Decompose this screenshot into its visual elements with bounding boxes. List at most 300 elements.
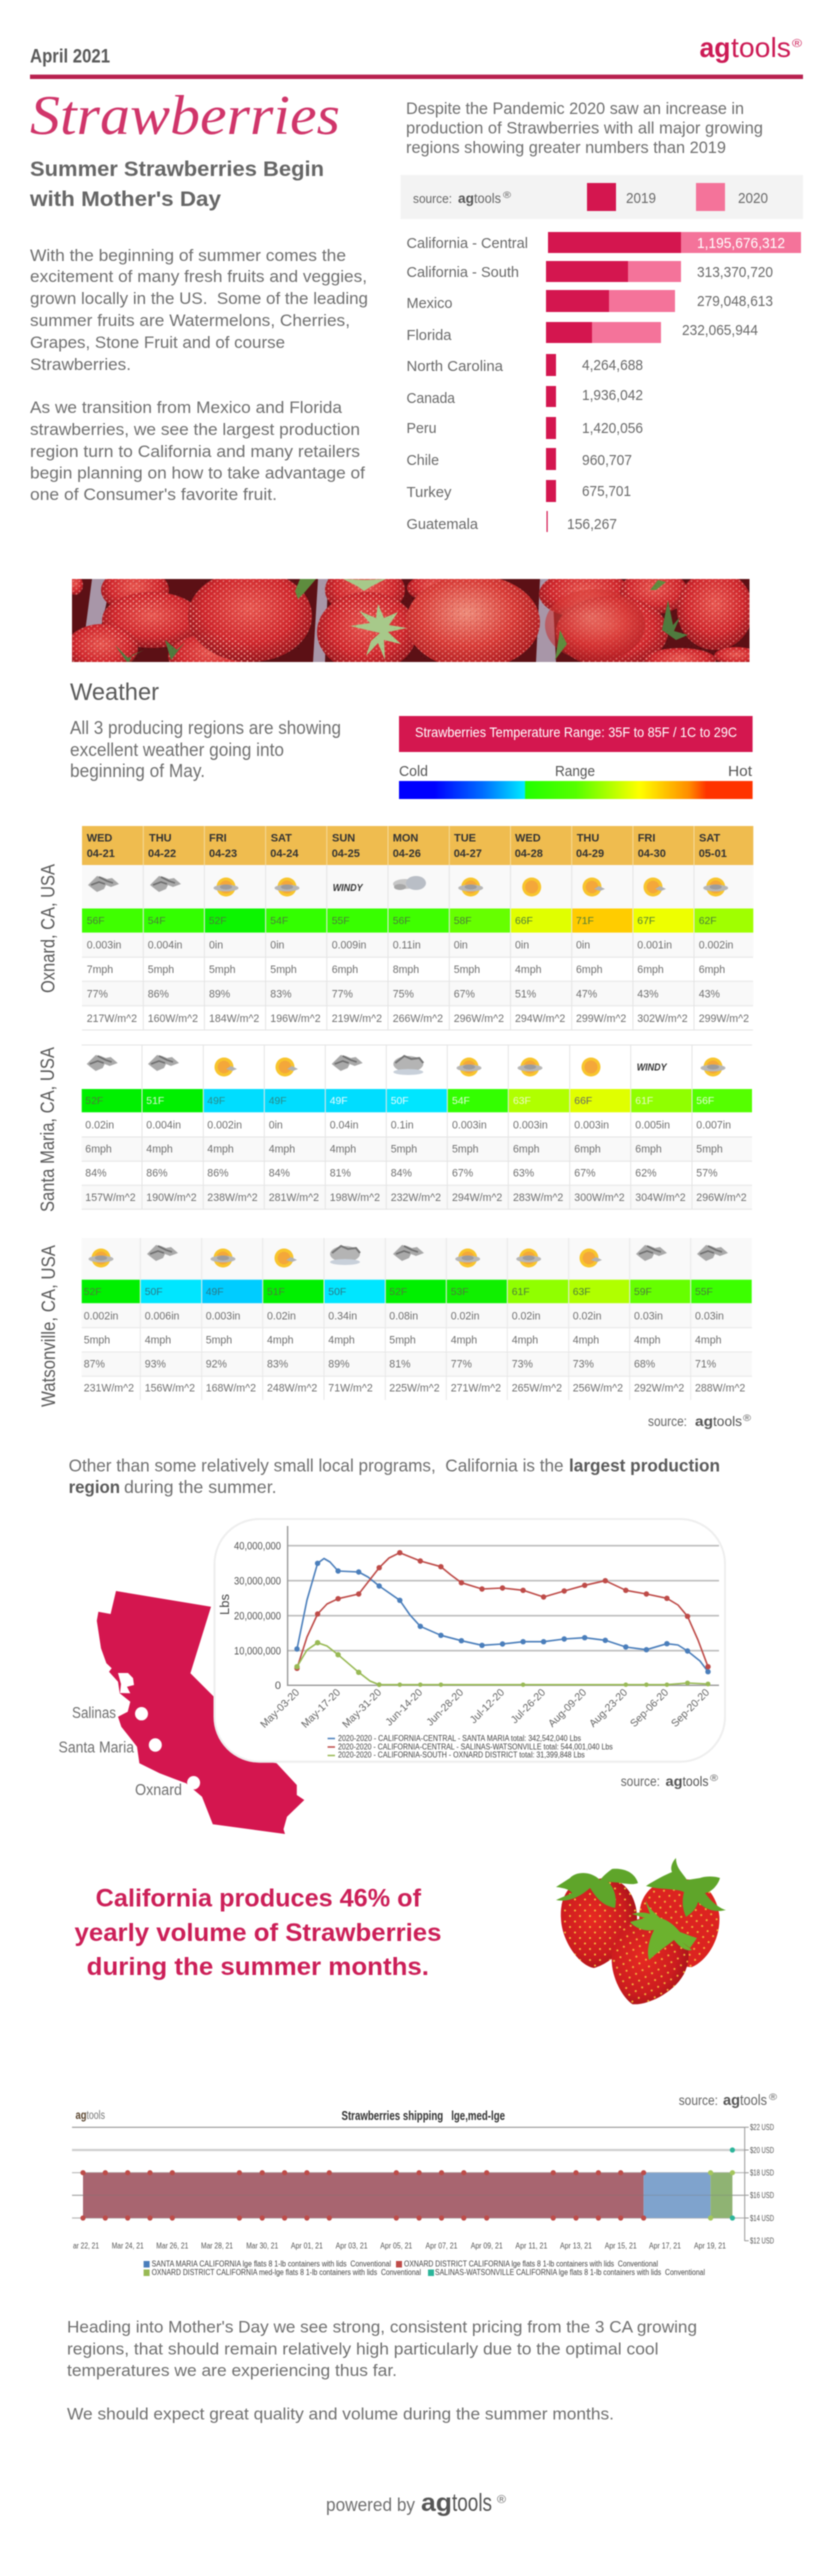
- date header: 04-22: [148, 848, 176, 860]
- humidity row: 83%: [270, 988, 292, 1000]
- humidity row: 77%: [332, 988, 353, 1000]
- y axis title: Lbs: [217, 1594, 232, 1615]
- humidity row: 67%: [454, 988, 475, 1000]
- humidity row: 84%: [391, 1168, 412, 1180]
- temperature row: 61F: [512, 1287, 530, 1298]
- date axis labels: Mar 28, 21: [201, 2241, 233, 2250]
- callout: California share: California produces 46% of: [96, 1885, 422, 1913]
- row: Guatemala: [406, 511, 617, 533]
- intro text right: Despite the Pandemic 2020 saw an increase in: [406, 99, 744, 118]
- source credit: weather: tools: [713, 1414, 742, 1429]
- weather icons row: [82, 865, 753, 908]
- rainfall row: [82, 933, 753, 957]
- wind row: 4mph: [695, 1334, 722, 1346]
- temperature row: 66F: [574, 1096, 592, 1107]
- rainfall row: 0.003in: [574, 1119, 609, 1131]
- area: Santa Maria: [644, 2173, 711, 2218]
- humidity row: 62%: [635, 1168, 657, 1180]
- marker: Santa Maria: Santa Maria: [58, 1740, 134, 1757]
- date header: WED: [87, 833, 112, 845]
- humidity row: 92%: [206, 1358, 227, 1370]
- humidity row: 43%: [699, 988, 720, 1000]
- temperature row: 63F: [573, 1287, 591, 1298]
- date axis labels: Apr 05, 21: [380, 2241, 413, 2250]
- temperature row: 51F: [146, 1096, 164, 1107]
- humidity row: 83%: [267, 1358, 289, 1370]
- source credit: shipping chart: ag: [723, 2092, 740, 2109]
- chart logo: [76, 2110, 105, 2122]
- source credit: shipping chart: [679, 2092, 777, 2109]
- header: agtools logo: [700, 32, 802, 63]
- legend key 2020: [696, 183, 768, 211]
- chart legend: 2020-2020 - CALIFORNIA-CENTRAL - SANTA MARIA total: 342,542,040 Lbs: [338, 1734, 581, 1743]
- date header: SUN: [332, 833, 355, 845]
- row: Florida: 232,065,944: [682, 322, 758, 339]
- wind row: 6mph: [513, 1144, 540, 1156]
- row: Peru: 1,420,056: [582, 420, 643, 437]
- wind row: 4mph: [512, 1334, 538, 1346]
- date axis labels: Apr 03, 21: [336, 2241, 368, 2250]
- humidity row: 86%: [148, 988, 169, 1000]
- rainfall row: 0.003in: [452, 1119, 487, 1131]
- temperature row: 50F: [328, 1287, 346, 1298]
- date header: SAT: [699, 833, 720, 845]
- date axis labels: ar 22, 21: [73, 2241, 99, 2250]
- wind row: 4mph: [634, 1334, 661, 1346]
- weather table: Santa Maria: [82, 1045, 752, 1209]
- footer: powered by agtools: ag: [421, 2489, 452, 2517]
- callout: California share: yearly volume of Strawberries: [74, 1919, 442, 1947]
- solar radiation row: [82, 1185, 752, 1209]
- x axis labels: Jul-12-20: [468, 1687, 507, 1726]
- temperature row: 62F: [699, 916, 717, 927]
- rainfall row: 0.04in: [330, 1119, 359, 1131]
- date axis labels: Apr 15, 21: [605, 2241, 637, 2250]
- wind row: 5mph: [206, 1334, 232, 1346]
- x axis labels: Jun-14-20: [383, 1687, 425, 1729]
- intro text right: regions showing greater numbers than 2019: [406, 138, 726, 157]
- solar radiation row: 256W/m^2: [573, 1383, 623, 1395]
- rainfall row: 0.001in: [637, 939, 672, 951]
- title: Strawberries: [30, 85, 340, 147]
- x axis labels: Aug-23-20: [587, 1687, 630, 1730]
- marker: Salinas: [72, 1705, 148, 1722]
- wind row: 4mph: [267, 1334, 294, 1346]
- intro paragraph left: one of Consumer's favorite fruit.: [30, 485, 277, 504]
- humidity row: 86%: [207, 1168, 229, 1180]
- solar radiation row: 288W/m^2: [695, 1383, 745, 1395]
- temperature row: 50F: [145, 1287, 163, 1298]
- x axis labels: Sep-20-20: [669, 1687, 712, 1730]
- rainfall row: 0.006in: [145, 1310, 180, 1322]
- temperature color scale: Cold: [399, 763, 428, 780]
- rainfall row: 0in: [209, 939, 223, 951]
- date header: 04-23: [209, 848, 237, 860]
- area chart: shipping prices: [72, 2109, 774, 2277]
- source credit: line chart: tools: [682, 1774, 709, 1789]
- date axis labels: Apr 07, 21: [426, 2241, 458, 2250]
- legend key 2019: [587, 183, 656, 211]
- temperature row: 52F: [85, 1096, 103, 1107]
- intro paragraph left: Grapes, Stone Fruit and of course: [30, 333, 285, 352]
- temperature row: 54F: [452, 1096, 470, 1107]
- rainfall row: 0.02in: [512, 1310, 541, 1322]
- date axis labels: [73, 2241, 726, 2250]
- wind row: 5mph: [209, 964, 236, 976]
- wind row: 4mph: [207, 1144, 234, 1156]
- rainfall row: 0in: [454, 939, 468, 951]
- weather icons row: WINDY: [637, 1063, 668, 1074]
- solar radiation row: 292W/m^2: [634, 1383, 684, 1395]
- rainfall row: [85, 1119, 731, 1131]
- data points: [80, 2147, 735, 2221]
- rainfall row: 0in: [270, 939, 285, 951]
- rainfall row: 0.08in: [389, 1310, 418, 1322]
- closing text: Heading into Mother's Day we see strong, consistent pricing from the 3 CA growing: [67, 2318, 697, 2337]
- date axis labels: Apr 19, 21: [694, 2241, 726, 2250]
- chart legend: [328, 1734, 613, 1760]
- y axis labels: 30,000,000: [234, 1576, 281, 1588]
- weather heading: Weather: [70, 679, 159, 706]
- wind row: 4mph: [515, 964, 542, 976]
- price axis labels: $18 USD: [750, 2168, 774, 2178]
- series: Santa Maria: [294, 1558, 711, 1674]
- wind row: 6mph: [576, 964, 603, 976]
- footer: powered by agtools: powered by: [326, 2495, 415, 2515]
- solar radiation row: 302W/m^2: [637, 1013, 688, 1025]
- chart legend: 2020-2020 - CALIFORNIA-CENTRAL - SALINAS-WATSONVILLE total: 544,001,040 Lbs: [338, 1743, 613, 1752]
- solar radiation row: 294W/m^2: [515, 1013, 565, 1025]
- rainfall row: 0.002in: [207, 1119, 242, 1131]
- solar radiation row: 294W/m^2: [452, 1192, 502, 1204]
- rainfall row: 0.004in: [148, 939, 183, 951]
- date header: [82, 826, 753, 865]
- date header: 04-24: [270, 848, 299, 860]
- region label: Watsonville: Watsonville, CA, USA: [39, 1245, 60, 1407]
- date header: 04-30: [638, 848, 666, 860]
- solar radiation row: 225W/m^2: [389, 1383, 440, 1395]
- row: Guatemala: Guatemala: [406, 516, 479, 533]
- weather icons row: [87, 1055, 725, 1076]
- date header: 04-25: [332, 848, 360, 860]
- humidity row: 73%: [573, 1358, 594, 1370]
- weather text: All 3 producing regions are showing: [70, 718, 341, 738]
- temperature row: 49F: [206, 1287, 224, 1298]
- solar radiation row: 217W/m^2: [87, 1013, 137, 1025]
- x axis labels: Aug-09-20: [546, 1687, 589, 1730]
- solar radiation row: 198W/m^2: [330, 1192, 380, 1204]
- legend key 2020: 2020: [738, 190, 768, 207]
- rainfall row: 0.003in: [513, 1119, 548, 1131]
- temperature row: 66F: [515, 916, 533, 927]
- humidity row: 77%: [87, 988, 108, 1000]
- date axis labels: Apr 01, 21: [291, 2241, 323, 2250]
- x axis labels: May-31-20: [340, 1687, 384, 1731]
- subtitle: Summer Strawberries Begin: [30, 157, 324, 181]
- shipping legend: [144, 2260, 705, 2277]
- wind row: 8mph: [393, 964, 419, 976]
- row: Turkey: [406, 480, 631, 502]
- weather icons row: [82, 1238, 752, 1280]
- series: Salinas-Watsonville: [294, 1550, 711, 1671]
- temperature row: 56F: [87, 916, 105, 927]
- humidity row: 93%: [145, 1358, 166, 1370]
- price axis labels: [750, 2123, 774, 2246]
- rainfall row: 0.005in: [635, 1119, 670, 1131]
- source credit: shipping chart: ®: [769, 2092, 777, 2102]
- temperature row: [82, 908, 753, 933]
- series: Oxnard district: [294, 1640, 710, 1687]
- subtitle: with Mother's Day: [29, 187, 221, 211]
- rainfall row: 0.003in: [206, 1310, 241, 1322]
- humidity row: 87%: [84, 1358, 105, 1370]
- wind row: 5mph: [148, 964, 174, 976]
- x axis labels: May-03-20: [258, 1687, 302, 1731]
- weather text: excellent weather going into: [70, 740, 284, 760]
- legend band: [401, 175, 803, 219]
- wind row: 4mph: [330, 1144, 356, 1156]
- price axis labels: $22 USD: [750, 2123, 774, 2132]
- intro paragraph left: With the beginning of summer comes the: [30, 246, 346, 265]
- date header: THU: [577, 833, 599, 845]
- date header: WED: [515, 833, 541, 845]
- source credit: line chart: [621, 1773, 718, 1789]
- shipping legend: OXNARD DISTRICT CALIFORNIA lge flats 8 1-lb containers with lids Conventional: [404, 2260, 658, 2269]
- temperature row: 49F: [207, 1096, 225, 1107]
- temperature row: 49F: [330, 1096, 348, 1107]
- wind row: 5mph: [696, 1144, 723, 1156]
- wind row: 4mph: [269, 1144, 295, 1156]
- humidity row: 68%: [634, 1358, 656, 1370]
- y axis labels: [234, 1540, 281, 1692]
- source label: tools: [474, 191, 501, 206]
- rainfall row: 0.03in: [634, 1310, 663, 1322]
- temperature row: [82, 1280, 752, 1303]
- wind row: 7mph: [87, 964, 113, 976]
- bar chart: production by region: [406, 232, 801, 533]
- date axis labels: Mar 24, 21: [112, 2241, 144, 2250]
- solar radiation row: 299W/m^2: [699, 1013, 749, 1025]
- row: Canada: Canada: [406, 390, 456, 407]
- date header: FRI: [638, 833, 655, 845]
- row: Turkey: 675,701: [582, 483, 631, 500]
- solar radiation row: 184W/m^2: [209, 1013, 259, 1025]
- bay cutout: [118, 1673, 134, 1693]
- row: North Carolina: [406, 354, 643, 376]
- weather table: Watsonville: [82, 1238, 752, 1400]
- closing text: temperatures we are experiencing thus far.: [67, 2361, 397, 2380]
- humidity row: 67%: [452, 1168, 474, 1180]
- row: Turkey: Turkey: [406, 484, 452, 501]
- humidity row: 89%: [328, 1358, 350, 1370]
- wind row: 6mph: [85, 1144, 112, 1156]
- rainfall row: 0in: [269, 1119, 283, 1131]
- wind row: 4mph: [146, 1144, 173, 1156]
- chart legend: 2020-2020 - CALIFORNIA-SOUTH - OXNARD DISTRICT total: 31,399,848 Lbs: [338, 1751, 585, 1760]
- temperature row: 56F: [696, 1096, 714, 1107]
- source credit: weather: ag: [695, 1414, 713, 1429]
- wind row: 6mph: [635, 1144, 662, 1156]
- wind row: [82, 1137, 752, 1161]
- rainfall row: 0.34in: [328, 1310, 357, 1322]
- date header: 05-01: [699, 848, 727, 860]
- humidity row: 43%: [637, 988, 659, 1000]
- date axis labels: Mar 30, 21: [246, 2241, 279, 2250]
- temperature color scale: [399, 763, 753, 799]
- humidity row: 47%: [576, 988, 598, 1000]
- date header: 04-21: [87, 848, 115, 860]
- row: Florida: Florida: [406, 327, 452, 344]
- closing text: We should expect great quality and volume during the summer months.: [67, 2404, 614, 2423]
- source credit: weather: [648, 1413, 751, 1429]
- text: largest production region: largest production: [569, 1456, 720, 1476]
- wind row: 6mph: [574, 1144, 601, 1156]
- date header: TUE: [454, 833, 476, 845]
- humidity row: 81%: [389, 1358, 411, 1370]
- wind row: 5mph: [452, 1144, 479, 1156]
- row: Chile: Chile: [406, 452, 439, 469]
- temperature row: 49F: [269, 1096, 287, 1107]
- date header: MON: [393, 833, 418, 845]
- humidity row: 73%: [512, 1358, 533, 1370]
- chart title: Strawberries shipping lge,med-lge: [342, 2109, 505, 2123]
- rainfall row: 0.007in: [696, 1119, 731, 1131]
- row: California South: California - South: [406, 264, 519, 281]
- date axis labels: Mar 26, 21: [156, 2241, 189, 2250]
- solar radiation row: 248W/m^2: [267, 1383, 317, 1395]
- source credit: line chart: source:: [621, 1774, 660, 1789]
- strawberry photo banner: [71, 578, 750, 663]
- solar radiation row: 283W/m^2: [513, 1192, 563, 1204]
- callout: California share: [74, 1885, 442, 1981]
- x axis labels: Sep-06-20: [628, 1687, 671, 1730]
- date header: FRI: [209, 833, 227, 845]
- solar radiation row: [87, 1013, 749, 1025]
- solar radiation row: [84, 1383, 745, 1395]
- wind row: 6mph: [332, 964, 358, 976]
- row: Mexico: [406, 290, 773, 312]
- humidity row: 86%: [146, 1168, 168, 1180]
- solar radiation row: 196W/m^2: [270, 1013, 321, 1025]
- solar radiation row: 157W/m^2: [85, 1192, 136, 1204]
- wind row: 5mph: [389, 1334, 416, 1346]
- temperature row: [82, 1089, 752, 1112]
- humidity row: [85, 1168, 718, 1180]
- temperature color scale: Range: [555, 763, 595, 780]
- temperature row: 53F: [451, 1287, 469, 1298]
- temperature range banner: [399, 716, 753, 752]
- date axis labels: Apr 13, 21: [560, 2241, 592, 2250]
- temperature row: 67F: [637, 916, 655, 927]
- price axis labels: $16 USD: [750, 2191, 774, 2200]
- source label: [413, 190, 511, 206]
- solar radiation row: 300W/m^2: [574, 1192, 625, 1204]
- closing text: regions, that should remain relatively high particularly due to the optimal cool: [67, 2339, 658, 2358]
- temperature row: 51F: [267, 1287, 285, 1298]
- solar radiation row: 71W/m^2: [328, 1383, 373, 1395]
- solar radiation row: 266W/m^2: [393, 1013, 443, 1025]
- source credit: weather: ®: [743, 1413, 751, 1423]
- intro paragraph left: summer fruits are Watermelons, Cherries,: [30, 311, 350, 330]
- rainfall row: 0.02in: [573, 1310, 602, 1322]
- x axis labels: [258, 1687, 712, 1731]
- solar radiation row: 271W/m^2: [451, 1383, 501, 1395]
- wind row: 5mph: [454, 964, 480, 976]
- closing text: [67, 2318, 697, 2423]
- y axis labels: 10,000,000: [234, 1646, 281, 1658]
- header: agtools logo: ®: [792, 38, 802, 50]
- solar radiation row: 296W/m^2: [454, 1013, 504, 1025]
- row: North Carolina: North Carolina: [406, 358, 504, 375]
- wind row: 4mph: [328, 1334, 355, 1346]
- x axis labels: Jun-28-20: [424, 1687, 466, 1729]
- wind row: 4mph: [145, 1334, 171, 1346]
- header: agtools logo: tools: [731, 32, 791, 63]
- source credit: line chart: ®: [710, 1773, 718, 1783]
- marker: Oxnard: [135, 1776, 200, 1799]
- date header: 04-26: [393, 848, 421, 860]
- wind row: 4mph: [573, 1334, 599, 1346]
- row: Guatemala: 156,267: [567, 516, 617, 533]
- temperature color scale: Hot: [728, 763, 753, 780]
- wind row: 5mph: [391, 1144, 417, 1156]
- row: Florida: [406, 322, 758, 344]
- humidity row: 84%: [85, 1168, 107, 1180]
- wind row: 6mph: [699, 964, 725, 976]
- area: Oxnard district lge: [83, 2173, 644, 2218]
- solar radiation row: 238W/m^2: [207, 1192, 258, 1204]
- footer: powered by agtools: [326, 2489, 506, 2517]
- intro paragraph left: region turn to California and many retailers: [30, 442, 360, 461]
- weather text: [70, 718, 341, 781]
- temperature row: 55F: [332, 916, 350, 927]
- intro text right: [406, 99, 763, 157]
- intro paragraph left: strawberries, we see the largest production: [30, 420, 360, 439]
- solar radiation row: 160W/m^2: [148, 1013, 198, 1025]
- temperature row: 61F: [635, 1096, 653, 1107]
- price axis labels: $20 USD: [750, 2146, 774, 2155]
- x axis labels: Jul-26-20: [509, 1687, 548, 1726]
- temperature row: 54F: [148, 916, 166, 927]
- source credit: line chart: ag: [666, 1774, 682, 1789]
- temperature range banner: Strawberries Temperature Range: 35F to 85F / 1C to 29C: [415, 724, 737, 740]
- wind row: [84, 1334, 722, 1346]
- date header: 04-27: [454, 848, 482, 860]
- date header: 04-29: [576, 848, 604, 860]
- rainfall row: 0.004in: [146, 1119, 181, 1131]
- row: Mexico: 279,048,613: [697, 293, 773, 310]
- temperature row: 59F: [634, 1287, 652, 1298]
- temperature row: 55F: [695, 1287, 713, 1298]
- shipping legend: SANTA MARIA CALIFORNIA lge flats 8 1-lb containers with lids Conventional: [152, 2260, 391, 2269]
- date axis labels: Apr 17, 21: [649, 2241, 681, 2250]
- marker: Oxnard: Oxnard: [135, 1782, 182, 1799]
- source credit: shipping chart: source:: [679, 2092, 718, 2108]
- rainfall row: 0.03in: [695, 1310, 724, 1322]
- rainfall row: 0.002in: [699, 939, 734, 951]
- humidity row: 71%: [695, 1358, 717, 1370]
- wind row: 6mph: [637, 964, 664, 976]
- legend key 2019: 2019: [626, 190, 656, 207]
- region label: Santa Maria: Santa Maria, CA, USA: [38, 1047, 59, 1212]
- text: largest production region: Other than some relatively small local programs, California is the: [69, 1456, 564, 1476]
- rainfall row: 0.02in: [267, 1310, 296, 1322]
- text: largest production region: region: [69, 1477, 120, 1497]
- illustration: three strawberries: [556, 1858, 726, 2017]
- rainfall row: 0in: [515, 939, 529, 951]
- row: Canada: [406, 386, 643, 407]
- rainfall row: 0.003in: [87, 939, 122, 951]
